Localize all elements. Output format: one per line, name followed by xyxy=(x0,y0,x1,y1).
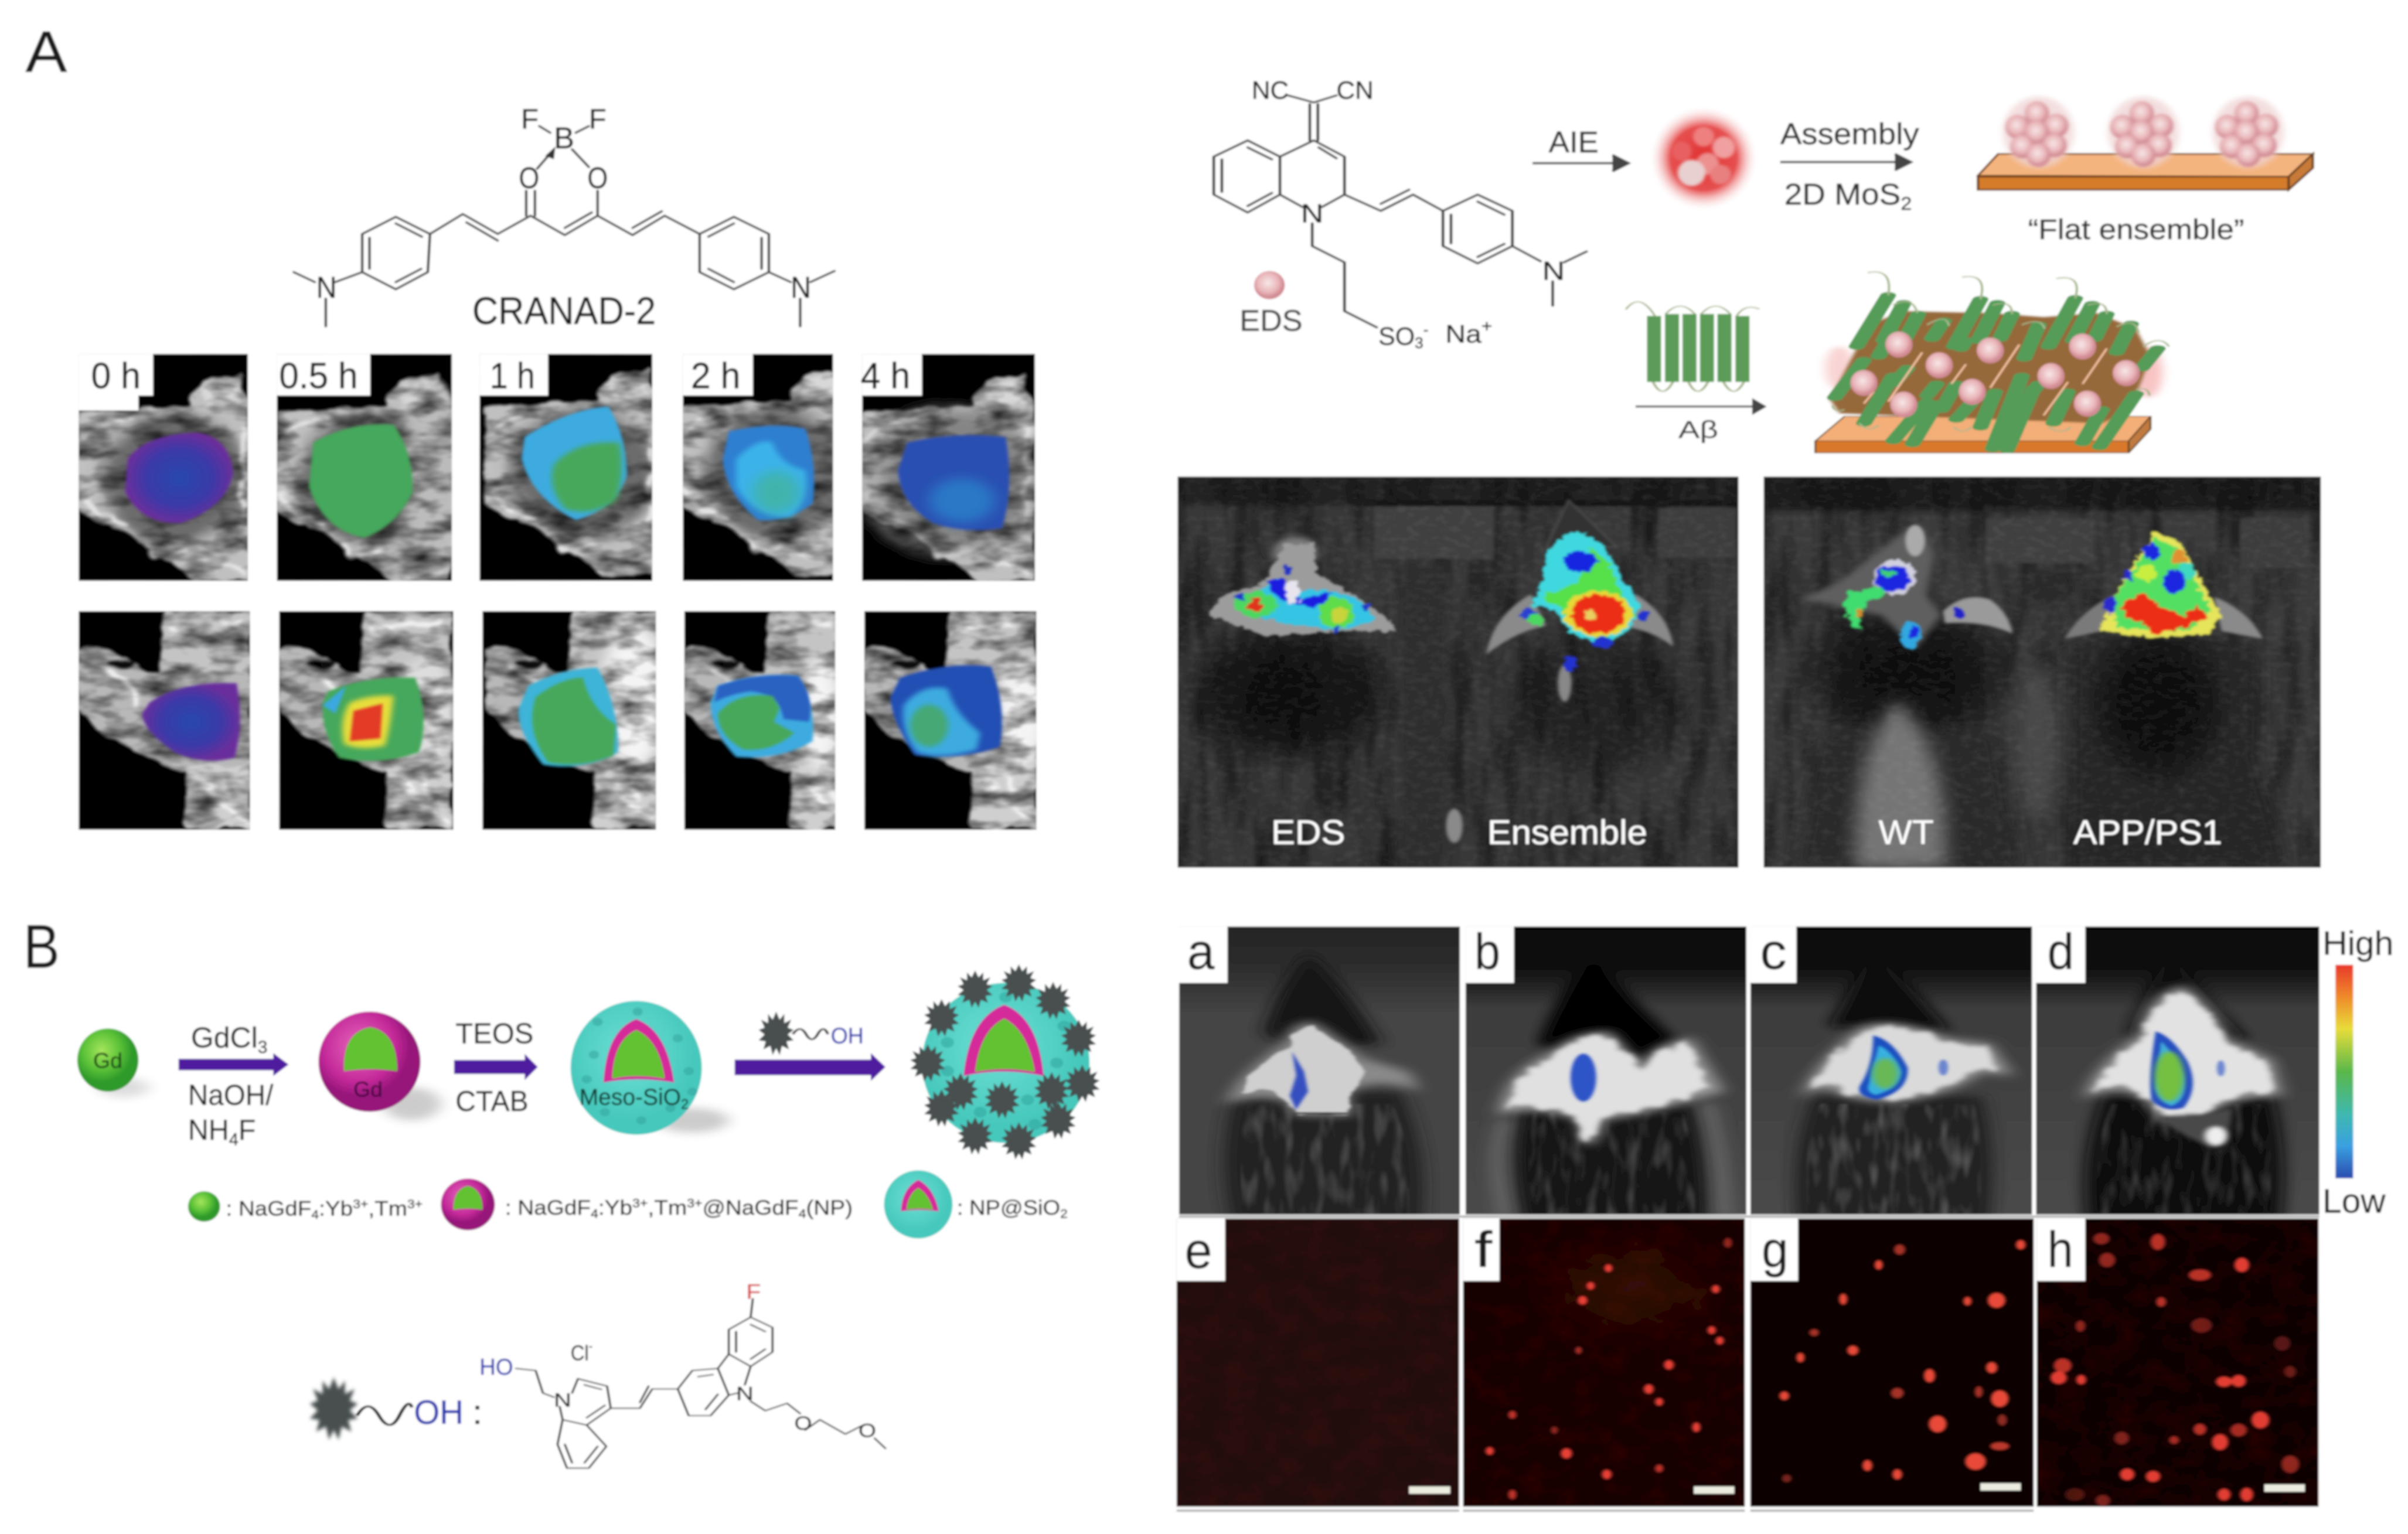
icon: Aβ hairpin xyxy=(1626,302,1759,391)
arrow purple 3 xyxy=(735,1053,885,1081)
labels EDS / Ensemble: EDS xyxy=(1271,814,1345,852)
tile 4 h row 2 xyxy=(862,611,1046,830)
chemical structure: EDS probe: + xyxy=(1481,318,1492,335)
panel: A left, CRANAD-2 imaging xyxy=(26,19,1046,830)
label AIE: AIE xyxy=(1549,125,1599,159)
flat ensemble on MoS2 sheet xyxy=(1978,97,2313,190)
scale bars xyxy=(1409,1483,2305,1494)
arrow assembly xyxy=(1780,154,1911,170)
time label 0 h xyxy=(79,354,153,410)
signal: EDS mouse xyxy=(1235,566,1376,633)
legend: NP: (NP) xyxy=(806,1196,853,1219)
panel: Aβ aggregation xyxy=(1626,272,2169,453)
icon: red AIE aggregate xyxy=(1649,105,1759,212)
dye icon and colon: OH xyxy=(414,1393,464,1431)
label Assembly: Assembly xyxy=(1780,117,1919,151)
tile 1 h row 2 xyxy=(482,611,667,830)
legend: NP: :Yb xyxy=(598,1196,632,1219)
labels WT / APP/PS1: WT xyxy=(1878,814,1934,852)
label EDS: EDS xyxy=(1239,304,1303,337)
time label 4 h: 4 h xyxy=(861,356,910,396)
panel: A right, EDS ensemble xyxy=(1214,77,2313,351)
chemical structure: EDS probe: SO xyxy=(1378,322,1432,350)
panel letter A: A xyxy=(26,19,67,84)
panel label b: b xyxy=(1474,923,1500,980)
chemical structure: CRANAD-2: F xyxy=(521,103,539,134)
legend: NP@SiO2: : NP@SiO xyxy=(957,1196,1125,1219)
panel label h xyxy=(2037,1219,2085,1281)
chemical structure: EDS probe: Na xyxy=(1445,321,1493,348)
chemical structure: dye molecule: N xyxy=(554,1389,571,1411)
panel label e: e xyxy=(1185,1223,1212,1279)
chemical structure: EDS probe: - xyxy=(1423,321,1428,338)
chemical structure: EDS probe: CN xyxy=(1336,77,1374,104)
chemical structure: dye molecule xyxy=(479,1280,885,1468)
tile 2 h row 2 xyxy=(682,611,856,830)
legend: core: 4 xyxy=(311,1208,319,1222)
fluorescence image f xyxy=(1463,1219,1745,1506)
mouse image a xyxy=(1179,926,1460,1221)
legend: core: ,Tm xyxy=(368,1196,407,1220)
signal: Ensemble mouse xyxy=(1522,531,1649,671)
color scale bar xyxy=(2335,965,2353,1178)
panel label h: h xyxy=(2048,1221,2073,1278)
tile 0 h row 2 xyxy=(77,611,251,830)
fluorescence image e xyxy=(1177,1219,1459,1506)
label TEOS: TEOS xyxy=(455,1017,533,1049)
fluorescence image g xyxy=(1750,1219,2034,1506)
panel label a: a xyxy=(1187,923,1215,980)
compound label CRANAD-2: CRANAD-2 xyxy=(472,289,656,333)
panel label g xyxy=(1750,1219,1798,1281)
panel label d: d xyxy=(2048,923,2074,980)
icon: dye with OH xyxy=(759,1011,864,1055)
panel label f: f xyxy=(1474,1221,1492,1278)
panel label d xyxy=(2036,923,2085,983)
labels EDS / Ensemble xyxy=(1271,814,1647,852)
panel: B left, nanoparticle synthesis xyxy=(23,912,1100,1468)
arrow purple 1 xyxy=(179,1053,288,1076)
amyloid ensemble on MoS2 sheet xyxy=(1816,272,2169,453)
chemical structure: EDS probe xyxy=(1214,77,1586,351)
panel label b xyxy=(1466,923,1514,983)
dye icon and colon xyxy=(310,1378,482,1440)
time label 2 h: 2 h xyxy=(691,356,740,396)
legend: NP@SiO2 xyxy=(884,1170,1068,1239)
signal: APP/PS1 mouse xyxy=(2099,531,2222,639)
label Aβ: Aβ xyxy=(1678,415,1718,444)
sphere: mesoporous silica xyxy=(571,1001,729,1134)
panel label f xyxy=(1463,1219,1500,1281)
chemical structure: CRANAD-2: O xyxy=(587,161,608,195)
label NaOH/NH4F: 4 xyxy=(229,1130,239,1149)
panel label e xyxy=(1177,1219,1225,1281)
tile 0.5 h row 1 xyxy=(273,354,466,587)
legend: core: 3+ xyxy=(407,1198,423,1211)
legend: NP@SiO2: 2 xyxy=(1060,1208,1068,1221)
arrow Aβ xyxy=(1636,398,1767,415)
chemical structure: EDS probe: NC xyxy=(1252,77,1289,104)
sphere: Gd core: Gd xyxy=(93,1049,122,1073)
chemical structure: dye molecule: Cl xyxy=(571,1342,607,1365)
legend: NP: 3+ xyxy=(687,1196,703,1210)
label GdCl3: GdCl xyxy=(191,1021,307,1054)
chemical structure: dye molecule: O xyxy=(859,1420,876,1441)
chemical structure: dye molecule: N xyxy=(736,1383,754,1404)
labels WT / APP/PS1: APP/PS1 xyxy=(2073,814,2222,852)
chemical structure: dye molecule: O xyxy=(795,1413,812,1434)
label CTAB: CTAB xyxy=(455,1085,529,1117)
legend: NP: @NaGdF xyxy=(703,1196,799,1219)
sphere: mesoporous silica: 2 xyxy=(681,1097,689,1112)
label NaOH/NH4F: NaOH/ xyxy=(188,1079,274,1111)
chemical structure: dye molecule: F xyxy=(746,1280,761,1303)
sphere: NaGdF4 shell xyxy=(318,1011,441,1120)
icon: EDS sphere xyxy=(1254,271,1285,299)
panel: B left, nanoparticle synthesis: B xyxy=(23,912,60,981)
legend: core: 3+ xyxy=(353,1198,368,1211)
chemical structure: CRANAD-2: B xyxy=(554,121,574,155)
label Flat ensemble: “Flat ensemble” xyxy=(2028,214,2244,245)
panel: B right, in vivo and staining xyxy=(1177,923,2393,1511)
panel label a xyxy=(1179,923,1228,983)
label 2D MoS2: 2 xyxy=(1900,193,1912,214)
tile 4 h row 1 xyxy=(856,354,1038,581)
sphere: NaGdF4 shell: Gd xyxy=(353,1078,383,1102)
tile 0 h row 1 xyxy=(77,354,251,581)
legend: core xyxy=(188,1191,423,1222)
legend: NP: ,Tm xyxy=(648,1196,687,1219)
mouse image b xyxy=(1466,926,1746,1221)
mouse image d xyxy=(2036,926,2320,1221)
labels WT / APP/PS1 xyxy=(1878,814,2222,852)
chemical structure: EDS probe: N xyxy=(1542,256,1565,285)
fluorescence image h xyxy=(2037,1219,2318,1506)
chemical structure: CRANAD-2 xyxy=(294,103,835,326)
photo: WT and APP/PS1 mice xyxy=(1764,476,2321,868)
arrow purple 2 xyxy=(454,1054,538,1080)
sphere: Gd core xyxy=(77,1028,149,1097)
photo: EDS and Ensemble mice xyxy=(1172,476,1739,868)
dye icon and colon: : xyxy=(472,1393,482,1431)
tile 0.5 h row 2 xyxy=(277,611,459,830)
chemical structure: CRANAD-2: N xyxy=(316,271,337,304)
sphere: dye-loaded particle xyxy=(910,964,1100,1160)
legend: core: : NaGdF xyxy=(226,1196,363,1220)
label NaOH/NH4F: F xyxy=(239,1114,256,1146)
chemical structure: EDS probe: N xyxy=(1301,199,1323,228)
label 2D MoS2: 2D MoS xyxy=(1784,178,1944,211)
label NaOH/NH4F: NH xyxy=(188,1114,262,1146)
legend: NP: 4 xyxy=(799,1208,806,1221)
mouse image c xyxy=(1750,926,2032,1221)
labels EDS / Ensemble: Ensemble xyxy=(1487,814,1647,852)
legend: NP xyxy=(441,1178,853,1230)
chemical structure: dye molecule: - xyxy=(589,1340,592,1354)
chemical structure: EDS probe: 3 xyxy=(1415,334,1423,351)
sphere: mesoporous silica: Meso-SiO xyxy=(580,1084,761,1110)
label NaOH/NH4F xyxy=(188,1079,274,1149)
time label 0 h: 0 h xyxy=(91,356,141,396)
time label 1 h: 1 h xyxy=(490,356,535,396)
panel label g: g xyxy=(1762,1221,1789,1278)
legend: core: :Yb xyxy=(319,1196,353,1220)
panel row separators xyxy=(1177,1216,2320,1511)
tile 2 h row 1 xyxy=(682,353,835,582)
chemical structure: CRANAD-2: N xyxy=(791,271,811,304)
chemical structure: CRANAD-2: F xyxy=(589,103,607,134)
label GdCl3: 3 xyxy=(258,1038,267,1056)
legend: NP: : NaGdF xyxy=(505,1196,643,1219)
panel label c: c xyxy=(1760,923,1787,980)
time label 0.5 h: 0.5 h xyxy=(279,356,358,396)
tile 1 h row 1 xyxy=(479,354,659,581)
chemical structure: dye molecule: HO xyxy=(479,1354,513,1379)
arrow AIE xyxy=(1532,155,1629,171)
signal: WT mouse xyxy=(1844,560,1964,649)
panel label c xyxy=(1750,923,1796,983)
icon: dye with OH: OH xyxy=(831,1023,864,1048)
chemical structure: CRANAD-2: O xyxy=(519,161,539,195)
legend: NP: 3+ xyxy=(632,1196,648,1210)
legend: NP: 4 xyxy=(591,1208,598,1221)
